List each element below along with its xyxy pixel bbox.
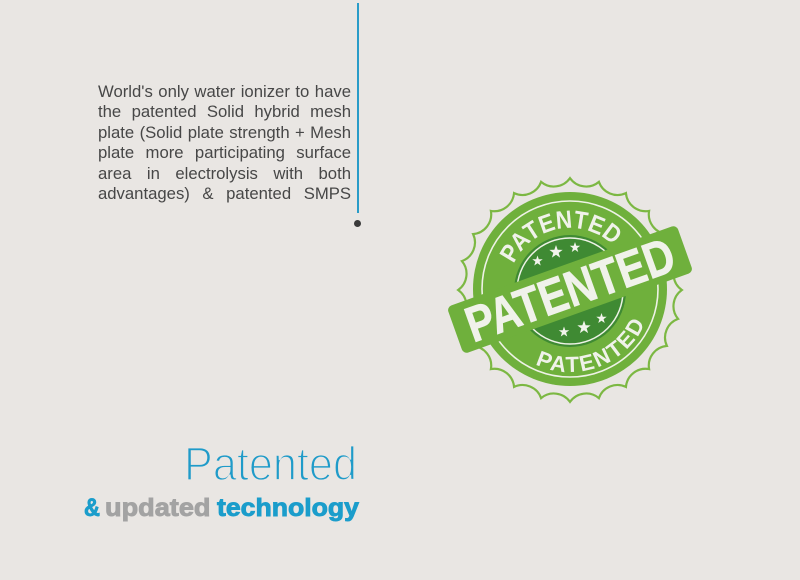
- word: updated: updated: [105, 494, 210, 522]
- word: technology: technology: [217, 494, 359, 522]
- description text block: advantages) & patented SMPS: [98, 184, 351, 203]
- diagonal banner: [446, 222, 694, 357]
- heading: Patented: Patented: [184, 437, 357, 490]
- subheading: [84, 494, 359, 522]
- vertical blue rule: [356, 3, 358, 213]
- rule end dot: [354, 220, 361, 227]
- badge centre ring: [517, 238, 623, 344]
- description text block: plate more participating surface: [98, 143, 351, 162]
- description text block: [98, 82, 351, 203]
- description text block: the patented Solid hybrid mesh: [98, 102, 351, 121]
- badge scalloped outer edge: [458, 178, 682, 402]
- description text block: World's only water ionizer to have: [98, 82, 351, 100]
- patented badge: [448, 176, 692, 404]
- badge dark centre: [514, 235, 626, 347]
- badge inner white ring: [482, 201, 658, 377]
- lower stars: [559, 313, 607, 336]
- description text block: area in electrolysis with both: [98, 164, 351, 183]
- description text block: plate (Solid plate strength + Mesh: [98, 123, 351, 142]
- badge green disc: [473, 192, 667, 386]
- top curved label: PATENTED: [499, 210, 620, 262]
- bottom curved label: PATENTED: [536, 320, 642, 372]
- banner label: PATENTED: [458, 227, 682, 353]
- ampersand: &: [84, 494, 100, 522]
- upper stars: [532, 242, 580, 265]
